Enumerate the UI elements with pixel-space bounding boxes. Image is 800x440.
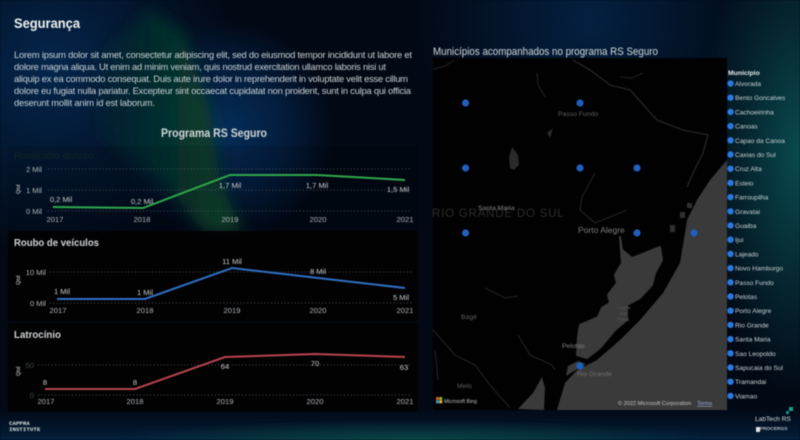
intro text block: Lorem ipsum dolor sit amet, consectetur adipiscing elit, sed do eiusmod tempor incididunt ut labore et xyxy=(14,49,412,60)
data labels: 8 xyxy=(43,378,47,387)
map: place labels: Bagé xyxy=(461,314,477,321)
x axis: 2021 xyxy=(397,306,413,315)
legend: Rio Grande xyxy=(735,322,769,329)
data labels xyxy=(50,181,409,206)
map heading: Municípios acompanhados no programa RS Seguro xyxy=(433,46,658,58)
x axis: 2018 xyxy=(137,306,153,315)
data labels: 1 Mil xyxy=(54,287,70,296)
map: lagoa dos patos xyxy=(577,237,662,358)
legend: Alvorada xyxy=(735,81,761,88)
legend: Caxias do Sul xyxy=(735,152,776,159)
legend: Guaiba xyxy=(735,223,757,230)
data labels: 70 xyxy=(311,359,319,368)
y axis: Qtd xyxy=(16,276,22,285)
x axis: 2020 xyxy=(310,306,326,315)
map: copyright: © 2022 Microsoft Corporation xyxy=(618,400,691,407)
legend: Santa Maria xyxy=(735,337,771,344)
map: rivers and borders xyxy=(433,60,708,408)
footer logo: labtech rs xyxy=(755,407,793,432)
legend: Município xyxy=(728,70,760,77)
legend: Farroupilha xyxy=(735,195,769,202)
x axis xyxy=(38,397,413,406)
map: place labels: RIO GRANDE DO SUL xyxy=(432,208,564,220)
legend: Cruz Alta xyxy=(735,166,762,173)
y axis: 0 Mil xyxy=(26,207,42,216)
legend: Cachoeirinha xyxy=(735,109,774,116)
legend xyxy=(727,70,786,400)
map: place labels: dos xyxy=(619,311,627,317)
chart group heading: Programa RS Seguro xyxy=(161,128,267,140)
map: municipality markers xyxy=(462,99,698,370)
panel: map xyxy=(432,58,727,410)
chart heading: Roubo de veículos xyxy=(14,237,99,249)
map: são gonçalo estuary xyxy=(566,361,586,376)
map: place labels: Rio Grande xyxy=(577,371,612,378)
intro text block: dolore magna aliqua. Ut enim ad minim veniam, quis nostrud exercitation ullamco laboris nisi ut xyxy=(14,61,386,72)
y axis: 50 xyxy=(26,361,34,370)
panel: roubo de veículos chart xyxy=(8,231,418,321)
data labels: 11 Mil xyxy=(222,257,242,266)
map: bing logo: Microsoft Bing xyxy=(444,399,477,405)
footer logo: cappra institute: CAPPRA xyxy=(9,420,30,427)
y axis xyxy=(16,361,34,400)
legend: Pelotas xyxy=(735,294,758,301)
data labels xyxy=(54,257,409,302)
y axis: 0 xyxy=(30,391,34,400)
y axis: Qtd xyxy=(16,185,22,194)
x axis: 2017 xyxy=(50,306,66,315)
legend: Ijui xyxy=(735,237,744,244)
data labels: 5 Mil xyxy=(393,293,409,302)
legend: Tramandai xyxy=(735,379,767,386)
footer logo: cappra institute: INSTITUTE xyxy=(9,426,41,433)
map: place labels: Pelotas xyxy=(562,343,585,350)
data labels: 64 xyxy=(221,362,229,371)
y axis: 0 Mil xyxy=(30,299,46,308)
legend: Novo Hamburgo xyxy=(735,266,783,273)
intro text block xyxy=(14,49,412,108)
map: place labels: Patos xyxy=(617,317,630,323)
x axis: 2019 xyxy=(222,215,238,224)
x axis: 2020 xyxy=(307,397,323,406)
data labels xyxy=(43,359,408,387)
legend: Canoas xyxy=(735,124,758,131)
intro text block: deserunt mollit anim id est laborum. xyxy=(14,97,155,108)
legend: Bento Goncalves xyxy=(735,95,786,102)
x axis: 2020 xyxy=(310,215,326,224)
y axis xyxy=(16,165,42,216)
footer logo: labtech rs: LabTech RS xyxy=(755,416,792,423)
blue line xyxy=(57,268,405,299)
x axis xyxy=(47,215,413,224)
data labels: 1,7 Mil xyxy=(219,181,241,190)
legend: Viamao xyxy=(735,393,758,400)
panel: homicídio chart xyxy=(8,146,418,230)
y axis: 10 Mil xyxy=(26,268,46,277)
legend: Porto Alegre xyxy=(735,308,772,315)
footer logo: cappra institute xyxy=(9,420,41,433)
intro text block: aliquip ex ea commodo consequat. Duis aute irure dolor in reprehenderit in voluptate velit esse cillum xyxy=(14,73,408,84)
legend: Lajeado xyxy=(735,251,759,258)
data labels: 0,2 Mil xyxy=(50,195,72,204)
map: place labels: Santa Maria xyxy=(478,205,515,212)
x axis: 2019 xyxy=(224,306,240,315)
map: place labels xyxy=(432,111,631,390)
legend: Gravatai xyxy=(735,209,760,216)
green line xyxy=(53,175,405,208)
x axis: 2017 xyxy=(38,397,54,406)
map: lagoa mirim xyxy=(518,377,545,410)
map: reservoirs xyxy=(509,128,553,170)
panel: latrocínio chart xyxy=(8,323,418,412)
data labels: 1,7 Mil xyxy=(306,181,328,190)
legend: Capao da Canoa xyxy=(735,138,785,145)
x axis: 2019 xyxy=(217,397,233,406)
intro text block: dolore eu fugiat nulla pariatur. Excepteur sint occaecat cupidatat non proident, sunt in culpa qui officia xyxy=(14,85,412,96)
x axis: 2021 xyxy=(397,397,413,406)
map: copyright xyxy=(618,400,712,407)
y axis: 2 Mil xyxy=(26,165,42,174)
data labels: 0,2 Mil xyxy=(131,197,153,206)
chart heading: Latrocínio xyxy=(14,329,61,341)
faint chart heading: Homicídio doloso xyxy=(14,150,94,162)
data labels: 1 Mil xyxy=(137,288,153,297)
map: place labels: Passo Fundo xyxy=(558,111,598,118)
red line xyxy=(45,354,405,389)
title: Segurança xyxy=(14,16,80,31)
y axis: Qtd xyxy=(16,367,22,376)
map: place labels: Melo xyxy=(457,383,472,390)
footer logo: labtech rs: PROCERGS xyxy=(760,426,788,432)
legend: Passo Fundo xyxy=(735,280,774,287)
map: copyright: Terms xyxy=(697,401,712,407)
map: coastal ponds xyxy=(670,203,692,232)
x axis: 2021 xyxy=(397,215,413,224)
legend: Esteio xyxy=(735,180,754,187)
data labels: 63 xyxy=(400,363,408,372)
data labels: 1,5 Mil xyxy=(387,185,409,194)
data labels: 8 xyxy=(133,378,137,387)
y axis: 1 Mil xyxy=(26,186,42,195)
data labels: 8 Mil xyxy=(310,267,326,276)
map: place labels: Porto Alegre xyxy=(578,225,625,235)
x axis: 2017 xyxy=(47,215,63,224)
legend: Sapucaia do Sul xyxy=(735,365,784,372)
legend: Sao Leopoldo xyxy=(735,351,776,358)
y axis xyxy=(16,268,46,308)
x axis xyxy=(50,306,413,315)
x axis: 2018 xyxy=(127,397,143,406)
map: place labels: Lagoa xyxy=(617,305,631,311)
map: bing logo xyxy=(436,397,477,405)
map: sea xyxy=(557,160,727,410)
x axis: 2018 xyxy=(134,215,150,224)
